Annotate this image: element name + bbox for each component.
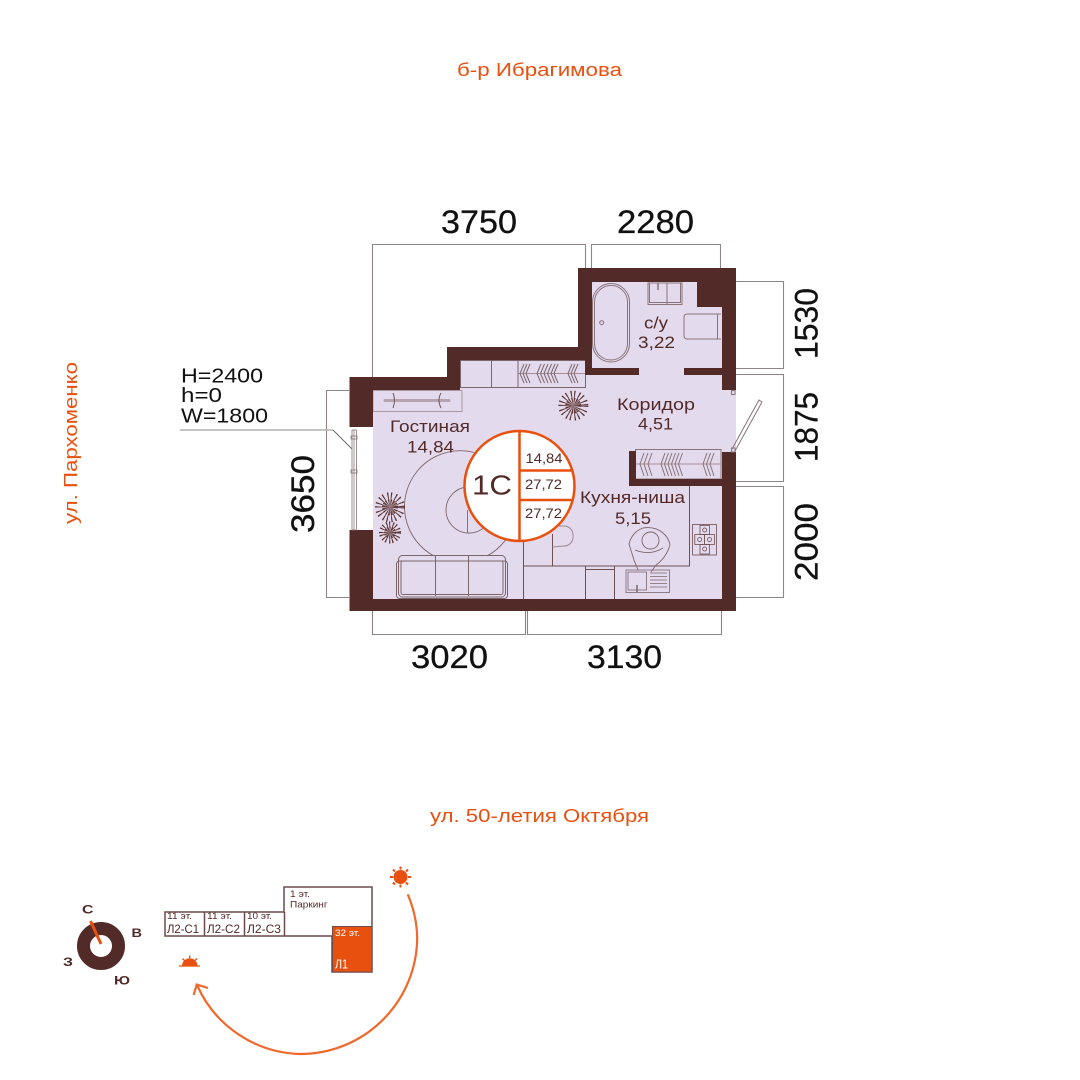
room labels: с/у xyxy=(644,314,669,332)
building plan: 10 эт. xyxy=(247,911,272,922)
wardrobe top xyxy=(460,360,586,388)
person at sink xyxy=(629,528,670,572)
building plan: Л2-С1 xyxy=(167,922,199,936)
sun: low xyxy=(179,956,200,966)
bathroom sink xyxy=(648,283,682,304)
window annotation xyxy=(180,366,352,449)
dimension numbers: 3020 xyxy=(411,639,488,675)
toilet xyxy=(684,314,721,339)
building plan: Л2-С3 xyxy=(247,922,281,936)
dimension lines xyxy=(326,244,784,634)
building plan: 11 эт. xyxy=(207,911,232,922)
apartment badge: 1С xyxy=(472,470,512,500)
compass: В xyxy=(132,928,142,940)
shelf in living room xyxy=(373,390,462,412)
window annotation: H=2400 xyxy=(181,366,263,388)
compass: С xyxy=(82,904,94,916)
street label: left: ул. Пархоменко xyxy=(60,362,81,524)
lower cabinet xyxy=(636,450,721,479)
entrance door xyxy=(732,390,762,452)
building plan xyxy=(165,887,372,972)
bathtub xyxy=(592,284,630,362)
dimension numbers: 2000 xyxy=(788,503,824,581)
walls xyxy=(350,268,736,611)
apartment floor xyxy=(373,282,736,599)
dimension numbers: 2280 xyxy=(617,204,694,240)
street label: top: б-р Ибрагимова xyxy=(457,59,623,80)
apartment badge: 27,72 xyxy=(525,505,562,521)
room labels: 5,15 xyxy=(615,509,651,528)
window annotation: W=1800 xyxy=(181,406,268,428)
dimension numbers: 1875 xyxy=(788,392,824,462)
window xyxy=(351,430,357,530)
room labels: 14,84 xyxy=(407,438,454,456)
stove xyxy=(692,524,716,555)
room labels: 4,51 xyxy=(638,414,673,434)
building plan: 32 эт. xyxy=(335,928,360,939)
room labels: Коридор xyxy=(617,395,695,414)
kitchen furniture xyxy=(524,486,690,599)
rug xyxy=(405,451,517,556)
building plan: 1 эт. xyxy=(290,889,310,900)
dimension numbers: 1530 xyxy=(788,288,824,359)
building plan: 11 эт. xyxy=(167,911,192,922)
room labels: 3,22 xyxy=(638,333,675,352)
room labels: Гостиная xyxy=(390,417,470,436)
dimension numbers: 3750 xyxy=(441,204,517,240)
dimension numbers xyxy=(285,204,824,675)
plants xyxy=(382,398,581,538)
street label: bottom: ул. 50-летия Октября xyxy=(430,805,649,826)
window annotation: h=0 xyxy=(181,385,222,407)
compass xyxy=(63,904,142,988)
room labels xyxy=(390,314,695,528)
building plan: Л1 xyxy=(335,958,348,972)
compass: Ю xyxy=(114,976,130,988)
apartment badge: 27,72 xyxy=(525,476,562,492)
building plan: Л2-С2 xyxy=(207,922,240,936)
apartment badge: 14,84 xyxy=(526,450,563,466)
dimension numbers: 3650 xyxy=(285,455,321,533)
room labels: Кухня-ниша xyxy=(580,488,686,507)
apartment badge xyxy=(464,431,574,541)
dimension numbers: 3130 xyxy=(587,639,662,675)
sofa xyxy=(396,556,508,598)
sun path arrow xyxy=(194,894,417,1054)
sun: high xyxy=(390,866,411,888)
building plan: Паркинг xyxy=(290,900,328,910)
kitchen sink xyxy=(626,570,670,592)
compass: З xyxy=(63,957,73,969)
